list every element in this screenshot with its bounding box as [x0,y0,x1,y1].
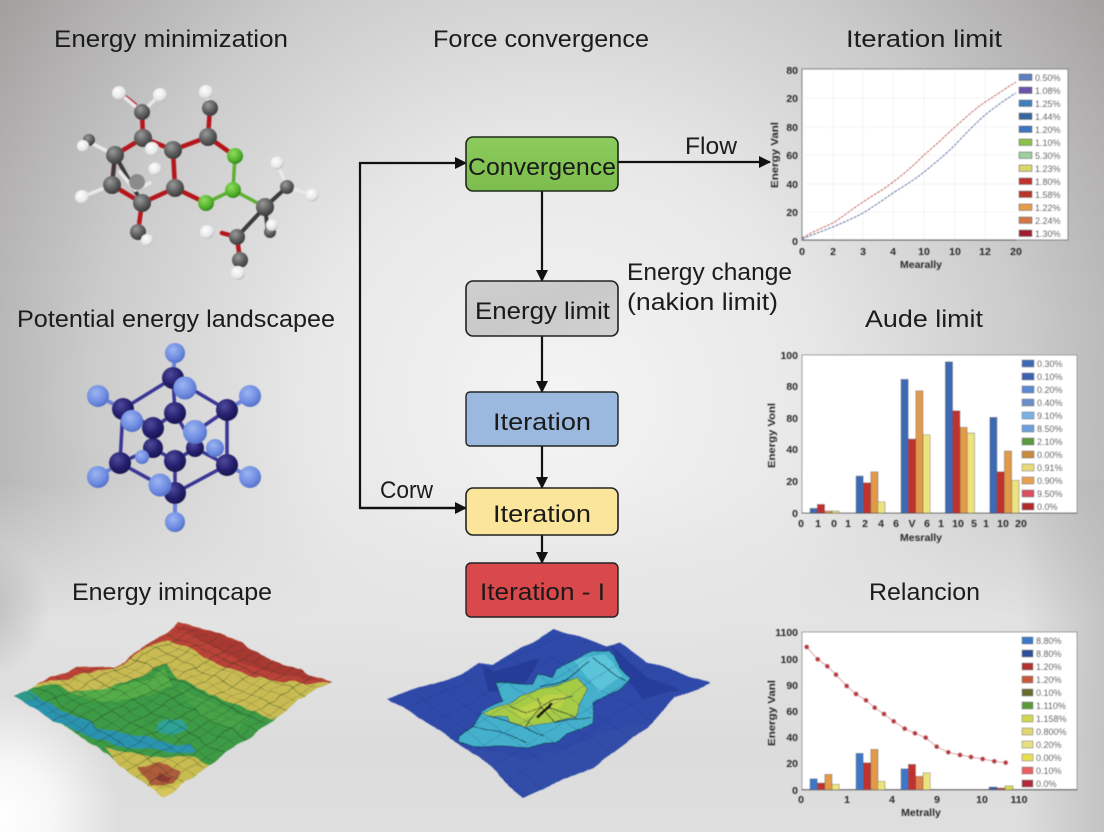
y axis ticks: 0 [792,508,798,520]
y axis ticks: 100 [780,350,798,362]
legend: 1.58% [1035,190,1061,200]
x axis ticks: 4 [878,518,884,530]
x axis ticks: 3 [860,246,866,258]
legend: 5.30% [1035,151,1061,161]
legend: 1.22% [1035,203,1061,213]
flow box: Iteration - I red [466,563,618,617]
atoms: green [198,148,243,211]
curve: blue [802,93,1016,239]
atoms: light blue [87,343,261,532]
chart: bar chart, Aude limit [766,350,1077,544]
x axis ticks: 6 [924,518,930,530]
x axis ticks: 10 [952,518,964,530]
bars [810,749,1013,790]
x axis ticks: 1 [815,518,821,530]
legend: 1.23% [1035,164,1061,174]
legend: 1.44% [1035,112,1061,122]
label: Energy change: (nakion limit) [627,289,778,316]
legend: 0.800% [1036,727,1067,737]
x axis ticks: 9 [934,794,940,806]
legend [1019,73,1061,239]
x axis ticks: 10 [976,794,988,806]
legend: 1.10% [1035,138,1061,148]
heading: Potential energy landscape: Potential energy landscapee [17,306,335,333]
y axis ticks: 40 [786,179,798,191]
y axis ticks: 40 [786,444,798,456]
axis title y: Energy Vanl [769,122,781,188]
legend: 0.30% [1037,359,1063,369]
arrow: iteration to iteration-I [541,535,543,563]
x axis ticks: 6 [893,518,899,530]
y axis ticks: 80 [786,381,798,393]
y axis ticks: 20 [786,93,798,105]
legend: 1.110% [1036,701,1066,711]
flow box: Iteration blue: Iteration [493,409,591,436]
atoms: dark blue [109,367,238,504]
legend: 0.0% [1037,502,1058,512]
label: Corw: Corw [380,477,434,504]
y axis ticks: 80 [786,65,798,77]
flow box: Iteration - I red: Iteration - I [480,579,605,606]
y axis ticks: 0 [792,785,798,797]
flow box: Iteration yellow: Iteration [493,501,591,528]
y axis ticks: 20 [786,758,798,770]
bars [810,362,1019,513]
legend: 9.50% [1037,489,1063,499]
arrow: feedback loop to iteration [360,507,466,509]
label: Flow: Flow [685,133,738,160]
x axis ticks: 10 [918,246,930,258]
y axis ticks: 100 [780,654,798,666]
y axis ticks: 60 [786,150,798,162]
legend: 1.80% [1035,177,1061,187]
legend: 8.80% [1036,636,1062,646]
heading: Relancion: Relancion [869,579,980,606]
x axis ticks: 4 [890,246,896,258]
heading: Aude limit: Aude limit [865,306,983,333]
flow box: Convergence [466,137,618,191]
y axis ticks: 20 [786,476,798,488]
flow box: Iteration yellow [466,488,618,535]
x axis ticks: 1 [845,518,851,530]
legend [1022,636,1067,789]
legend: 2.10% [1037,437,1063,447]
x axis ticks: 20 [1015,518,1027,530]
flow box: Iteration blue [466,392,618,446]
x axis ticks: 1 [938,518,944,530]
x axis ticks: 12 [979,246,991,258]
legend: 8.80% [1036,649,1062,659]
arrow: convergence to energy limit [541,191,543,281]
x axis ticks [799,246,1022,258]
legend: 0.91% [1037,463,1063,473]
chart: bar and dot chart, Relancion [766,627,1077,819]
x axis ticks: 0 [831,518,837,530]
legend: 8.50% [1037,424,1063,434]
atoms: carbon [83,100,294,268]
legend: 2.24% [1035,216,1061,226]
molecule: blue cage structure [87,343,261,532]
x axis ticks: 5 [971,518,977,530]
heading: Force convergence: Force convergence [433,26,649,53]
chart: line chart, Iteration limit [769,65,1068,271]
surface: rainbow energy landscape [14,621,332,798]
legend: 1.20% [1036,662,1062,672]
axis title x: Mearally [900,259,942,271]
legend: 0.90% [1037,476,1063,486]
legend: 1.20% [1035,125,1061,135]
x axis ticks: 110 [1011,794,1028,806]
flow box: Energy limit [466,281,618,336]
heading: Iteration limit: Iteration limit [846,26,1002,53]
y axis ticks [786,65,798,248]
legend: 0.40% [1037,398,1063,408]
legend [1022,359,1063,512]
legend: 1.158% [1036,714,1067,724]
legend: 1.20% [1036,675,1062,685]
y axis ticks: 20 [786,207,798,219]
x axis ticks: 0 [798,794,804,806]
x axis ticks [798,794,1028,806]
label: Energy change: Energy change [627,259,792,286]
flow: connector arrows [360,162,770,563]
arrow: flow to chart [618,161,770,163]
legend: 9.10% [1037,411,1063,421]
surface: blue energy well [386,628,711,799]
x axis ticks: 0 [798,518,804,530]
x axis ticks: 10 [997,518,1009,530]
atoms: hydrogen [75,85,318,280]
mesh lines [25,626,322,792]
legend: 0.20% [1037,385,1063,395]
flow box: Convergence: Convergence [468,154,616,181]
y axis ticks [775,627,798,797]
y axis ticks [780,350,798,520]
x axis ticks: 20 [1010,246,1022,258]
y axis ticks: 90 [786,680,798,692]
legend: 0.10% [1037,372,1063,382]
y axis ticks: 60 [786,706,798,718]
arrow: feedback loop to convergence [360,163,466,508]
x axis ticks: 1 [844,794,850,806]
x axis ticks: 4 [889,794,895,806]
x axis ticks: 2 [830,246,836,258]
y axis ticks: 80 [786,413,798,425]
legend: 1.25% [1035,99,1061,109]
axis title y: Energy Vanl [766,680,778,746]
y axis ticks: 40 [786,732,798,744]
x axis ticks: 1 [983,518,989,530]
curve: red [802,82,1016,238]
x axis ticks [798,518,1027,530]
legend: 1.08% [1035,86,1061,96]
x axis ticks: 2 [862,518,868,530]
contour lines [473,660,625,742]
arrow: iteration to iteration [541,446,543,488]
axis title y: Energy Vonl [766,403,778,468]
axis title x: Metrally [901,807,941,819]
x axis ticks: 10 [949,246,961,258]
y axis ticks: 1100 [775,627,798,639]
x axis ticks: V [908,518,916,530]
x axis ticks: 0 [799,246,805,258]
heading: Energy minimization: Energy minimization [54,26,288,53]
legend: 0.10% [1036,766,1062,776]
label: Energy change [627,259,792,316]
dotted trend line [807,647,1006,763]
molecule: ball and stick with green atoms [75,85,318,280]
legend: 0.00% [1037,450,1063,460]
legend: 0.10% [1036,688,1062,698]
legend: 0.50% [1035,73,1061,83]
y axis ticks: 80 [786,122,798,134]
heading: Energy landscape: Energy iminqcape [72,579,272,606]
axis title x: Mesrally [900,532,942,544]
legend: 0.20% [1036,740,1062,750]
legend: 0.00% [1036,753,1062,763]
y axis ticks: 0 [792,236,798,248]
flow box: Energy limit: Energy limit [475,298,610,325]
legend: 1.30% [1035,229,1061,239]
legend: 0.0% [1036,779,1057,789]
arrow: energy limit to iteration [541,336,543,392]
